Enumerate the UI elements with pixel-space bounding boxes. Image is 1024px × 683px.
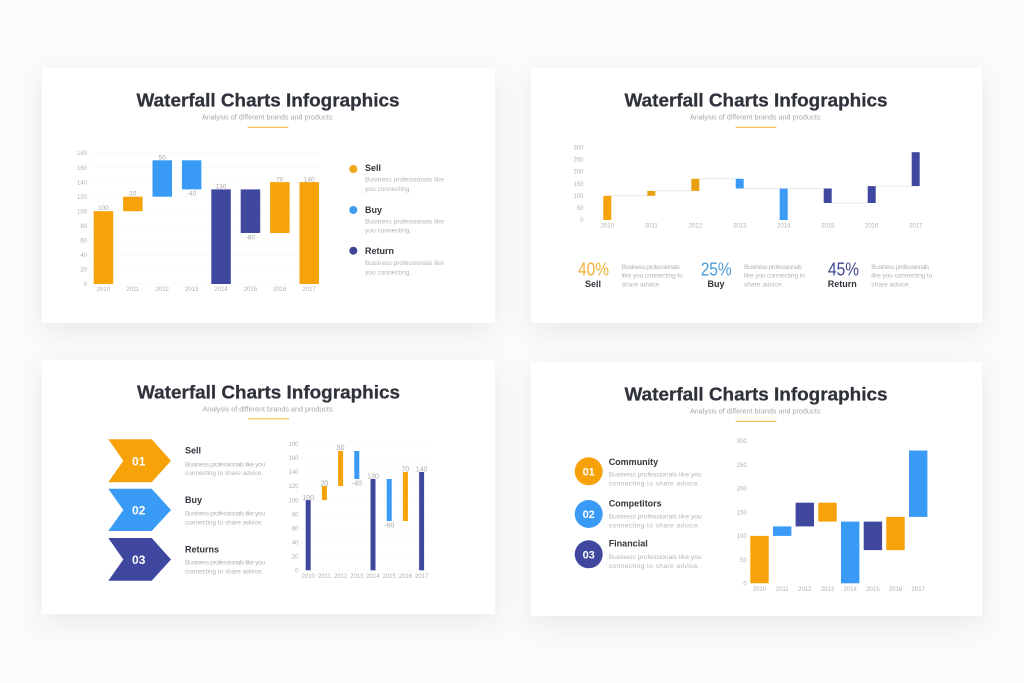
bar chart: waterfall with connectors	[573, 146, 923, 230]
bar chart: narrow waterfall: 50	[337, 445, 345, 452]
bar chart: waterfall 2010-2017: 20	[80, 268, 88, 274]
bar chart: narrow waterfall: 140	[416, 466, 428, 474]
legend	[349, 163, 444, 276]
bar chart: wide waterfall: 50	[740, 558, 747, 564]
bar chart: waterfall 2010-2017: 100	[98, 205, 109, 212]
bar chart: waterfall 2010-2017: 130	[216, 183, 227, 190]
legend: you connecting.	[365, 186, 411, 193]
item: competitors	[575, 498, 702, 529]
bar chart: wide waterfall: 2013	[821, 587, 835, 593]
text: returns: connecting to share advice.	[185, 568, 263, 575]
heading underline	[736, 421, 776, 422]
title: Waterfall Charts Infographics	[137, 382, 400, 402]
bar chart: narrow waterfall: 40	[292, 540, 299, 546]
item: community: 01	[583, 466, 595, 478]
bar chart: wide waterfall: 100	[737, 534, 747, 540]
bar chart: waterfall 2010-2017	[77, 151, 322, 293]
bar chart: waterfall with connectors: 100	[573, 194, 584, 200]
stat: sell 40%: 40%	[578, 260, 609, 280]
bar chart: narrow waterfall: 120	[288, 484, 299, 490]
item: community: Community	[609, 457, 658, 467]
item: competitors: 02	[583, 509, 595, 521]
bar chart: narrow waterfall: -40	[352, 480, 362, 488]
title: Waterfall Charts Infographics	[136, 90, 400, 110]
legend: you connecting.	[365, 269, 411, 276]
bar chart: waterfall 2010-2017: 2011	[126, 287, 140, 293]
stat: sell 40%: Business professionals	[622, 264, 680, 271]
bar chart: narrow waterfall: 0	[295, 568, 299, 574]
bar chart: narrow waterfall: -60	[384, 522, 394, 530]
stat: return 45%: Business professionals	[871, 264, 930, 271]
item: competitors: Competitors	[609, 498, 662, 508]
bar chart: wide waterfall	[737, 439, 927, 593]
bar chart: waterfall 2010-2017: 2010	[97, 287, 111, 293]
item: community: Business professionals like you	[609, 472, 702, 479]
bar chart: narrow waterfall: 2016	[399, 574, 413, 580]
bar chart: waterfall with connectors: 2013	[733, 224, 747, 230]
bar chart: narrow waterfall	[288, 442, 430, 580]
bar chart: waterfall 2010-2017: 2016	[273, 287, 287, 293]
bar chart: narrow waterfall: 2010	[302, 574, 316, 580]
text: buy	[185, 495, 265, 526]
chevron 03	[108, 538, 171, 581]
bar chart: narrow waterfall: 2015	[383, 574, 397, 580]
stat: buy 25%: Business professionals	[744, 264, 803, 271]
bar chart: narrow waterfall: 20	[292, 554, 299, 560]
bar chart: waterfall 2010-2017: 120	[77, 195, 88, 201]
bar chart: narrow waterfall: 160	[288, 456, 299, 462]
heading underline	[248, 127, 288, 128]
bar chart: waterfall 2010-2017: 40	[80, 253, 88, 259]
item: financial: Business professionals like you	[609, 554, 702, 561]
bar chart: wide waterfall: 200	[737, 487, 747, 493]
text: buy: Buy	[185, 495, 202, 505]
item: competitors: Business professionals like you	[609, 513, 702, 520]
bar chart: waterfall 2010-2017: 160	[77, 166, 88, 172]
bar chart: waterfall 2010-2017: 180	[77, 151, 88, 157]
bar chart: waterfall 2010-2017: 60	[80, 238, 88, 244]
bar chart: narrow waterfall: 80	[292, 512, 299, 518]
bar chart: waterfall 2010-2017: 140	[304, 176, 315, 183]
heading underline	[248, 418, 289, 419]
bar chart: narrow waterfall: 100	[288, 498, 299, 504]
subtitle: Analysis of different brands and products.	[690, 408, 822, 416]
bar chart: waterfall with connectors: 200	[573, 170, 584, 176]
subtitle: Analysis of different brands and products.	[202, 406, 335, 414]
subtitle: Analysis of different brands and products.	[690, 114, 822, 122]
bar chart: narrow waterfall: 180	[288, 442, 299, 448]
bar chart: wide waterfall: 250	[737, 463, 747, 469]
bar chart: wide waterfall: 2016	[889, 587, 903, 593]
bar chart: waterfall 2010-2017: 140	[77, 180, 88, 186]
stat: return 45%: Return	[828, 279, 857, 289]
bar chart: wide waterfall: 300	[737, 439, 747, 445]
chevron 02	[108, 489, 171, 531]
item: financial: connecting to share advice.	[609, 563, 700, 570]
text: returns: Returns	[185, 544, 219, 554]
item: competitors: connecting to share advice.	[609, 522, 700, 529]
bar chart: waterfall 2010-2017: 0	[84, 282, 88, 288]
title: Waterfall Charts Infographics	[624, 384, 888, 404]
bar chart: narrow waterfall: 2012	[334, 574, 348, 580]
bar chart: narrow waterfall: 60	[292, 526, 299, 532]
text: sell: Business professionals like you	[185, 461, 265, 468]
bar chart: wide waterfall: 2012	[798, 587, 812, 593]
bar chart: waterfall 2010-2017: -60	[246, 234, 255, 241]
bar chart: waterfall with connectors: 300	[573, 146, 584, 152]
bar chart: narrow waterfall: 140	[288, 470, 299, 476]
bar chart: waterfall with connectors: 50	[577, 206, 584, 212]
text: returns: Business professionals like you	[185, 560, 265, 567]
item: financial: 03	[583, 549, 595, 561]
stat: return 45%: share advice.	[871, 281, 911, 288]
heading underline	[736, 127, 776, 128]
chevron 03: 03	[132, 553, 146, 567]
bar chart: narrow waterfall: 2017	[415, 574, 429, 580]
bar chart: waterfall with connectors: 150	[573, 182, 584, 188]
title: Waterfall Charts Infographics	[624, 90, 888, 110]
bar chart: narrow waterfall: 130	[367, 474, 379, 480]
text: returns	[185, 544, 265, 575]
legend: Business professionals like	[365, 260, 444, 267]
bar chart: waterfall 2010-2017: 80	[80, 224, 88, 230]
stat: return 45%: 45%	[828, 260, 859, 280]
bar chart: wide waterfall: 2011	[776, 587, 789, 593]
stat: sell 40%	[578, 260, 683, 289]
bar chart: narrow waterfall: 70	[402, 466, 409, 474]
bar chart: waterfall with connectors: 2012	[689, 224, 703, 230]
stat: buy 25%	[701, 260, 805, 289]
bar chart: wide waterfall: 2015	[866, 587, 880, 593]
legend: Return	[365, 246, 394, 256]
chevron 01	[108, 439, 171, 482]
bar chart: waterfall with connectors: 2015	[821, 224, 835, 230]
bar chart: waterfall 2010-2017: 2014	[214, 287, 228, 293]
bar chart: waterfall 2010-2017: 50	[159, 154, 166, 162]
bar chart: narrow waterfall: 2011	[318, 574, 332, 580]
stat: buy 25%: Buy	[707, 279, 725, 289]
stat: sell 40%: like you connecting to	[622, 273, 683, 280]
panel: bottom right circles and chart	[531, 362, 982, 616]
legend: Sell	[365, 163, 381, 173]
chevron 02: 02	[132, 504, 146, 518]
bar chart: waterfall 2010-2017: 2017	[303, 287, 317, 293]
bar chart: waterfall with connectors: 2014	[777, 224, 791, 230]
bar chart: wide waterfall: 0	[743, 582, 747, 588]
legend: Buy	[365, 205, 382, 215]
legend: Business professionals like	[365, 218, 444, 225]
bar chart: wide waterfall: 2014	[844, 587, 858, 593]
stat: sell 40%: share advice.	[622, 281, 661, 288]
item: financial: Financial	[609, 539, 648, 549]
bar chart: waterfall 2010-2017: 70	[276, 176, 284, 183]
panel: bottom left chevrons and chart	[42, 360, 495, 614]
bar chart: waterfall with connectors: 250	[573, 158, 584, 164]
bar chart: wide waterfall: 2017	[912, 587, 926, 593]
bar chart: narrow waterfall: 2013	[350, 574, 364, 580]
bar chart: waterfall 2010-2017: 2012	[156, 287, 170, 293]
stat: buy 25%: 25%	[701, 260, 732, 280]
bar chart: narrow waterfall: 100	[302, 495, 314, 502]
subtitle: Analysis of different brands and products.	[202, 114, 334, 122]
stat: sell 40%: Sell	[585, 279, 601, 289]
bar chart: waterfall 2010-2017: 2013	[185, 287, 199, 293]
text: buy: Business professionals like you	[185, 510, 265, 517]
item: financial	[575, 539, 702, 570]
stat: buy 25%: like you connecting to	[744, 273, 805, 280]
bar chart: waterfall with connectors: 2017	[909, 224, 923, 230]
text: buy: connecting to share advice.	[185, 519, 263, 526]
bar chart: waterfall with connectors: 2010	[601, 224, 615, 230]
panel: top right waterfall chart	[531, 68, 982, 323]
bar chart: narrow waterfall: 2014	[366, 574, 380, 580]
bar chart: waterfall 2010-2017: 100	[77, 209, 88, 215]
bar chart: waterfall with connectors: 2016	[865, 224, 879, 230]
bar chart: waterfall with connectors: 0	[580, 218, 584, 224]
legend: Business professionals like	[365, 177, 444, 184]
bar chart: waterfall 2010-2017: 2015	[244, 287, 258, 293]
text: sell	[185, 446, 265, 477]
bar chart: waterfall 2010-2017: -40	[187, 190, 197, 197]
legend: you connecting.	[365, 228, 411, 235]
item: community: connecting to share advice.	[609, 481, 700, 488]
text: sell: Sell	[185, 446, 201, 456]
bar chart: narrow waterfall: 20	[321, 480, 328, 488]
stat: return 45%	[828, 260, 933, 289]
stat: buy 25%: share advice.	[744, 281, 783, 288]
bar chart: wide waterfall: 150	[737, 510, 747, 516]
panel: top left waterfall chart	[42, 68, 495, 323]
bar chart: waterfall with connectors: 2011	[645, 224, 658, 230]
item: community	[575, 457, 702, 488]
bar chart: waterfall 2010-2017: 20	[129, 190, 137, 198]
bar chart: wide waterfall: 2010	[753, 587, 767, 593]
chevron 01: 01	[132, 454, 146, 468]
stat: return 45%: like you connecting to	[871, 273, 933, 280]
text: sell: connecting to share advice.	[185, 470, 263, 477]
